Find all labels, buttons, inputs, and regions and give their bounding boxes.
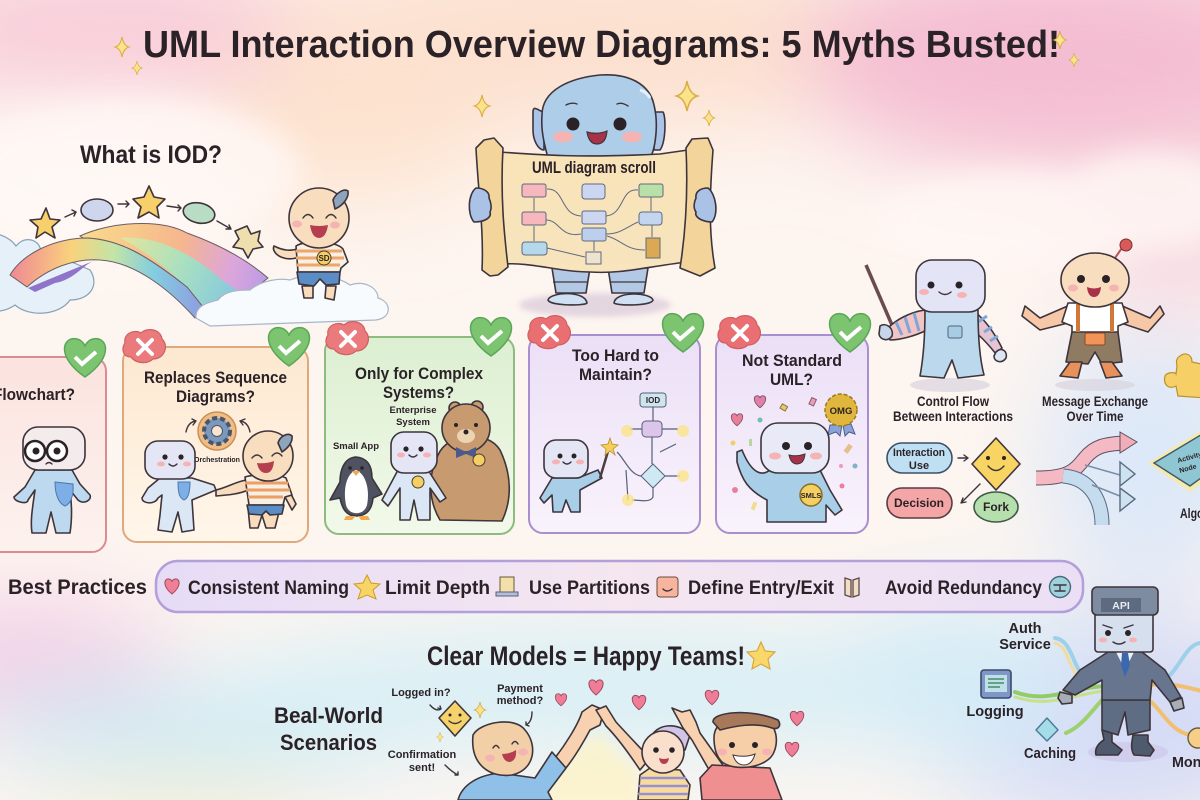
icon: orchestration gear bbox=[186, 412, 250, 464]
confetti bbox=[730, 396, 858, 510]
icon: smiling tile bbox=[657, 577, 678, 597]
heading: not standard UML: UML? bbox=[770, 370, 813, 389]
badge: OMG rosette: OMG bbox=[830, 406, 852, 417]
heading: only for complex systems bbox=[355, 364, 483, 402]
icon: logging panel bbox=[981, 670, 1011, 698]
badge: true heart bbox=[268, 328, 310, 366]
scene: team high five bbox=[388, 680, 804, 800]
character: celebrating robot bbox=[737, 423, 842, 522]
hearts bbox=[555, 680, 804, 757]
item: use partitions: Use Partitions bbox=[529, 577, 650, 599]
badge: OMG rosette bbox=[825, 394, 857, 436]
labels: scenario questions bbox=[388, 683, 543, 775]
title: UML Interaction Overview Diagrams: 5 Myths Busted! bbox=[143, 24, 1060, 66]
illustration: robot holding UML scroll bbox=[469, 75, 716, 317]
icon: robot face bbox=[1050, 576, 1070, 598]
label: logging: Logging bbox=[966, 704, 1024, 720]
panel: best practices pill bbox=[156, 561, 1083, 612]
icon: activity node tile: Node bbox=[1179, 463, 1197, 475]
character: teacher robot with pointer bbox=[866, 260, 1006, 392]
stars bbox=[30, 186, 263, 258]
item: define entry/exit: Define Entry/Exit bbox=[688, 577, 834, 599]
icon: open book bbox=[845, 578, 859, 597]
heading: only for complex systems: Systems? bbox=[383, 383, 454, 402]
character: robot shaking hands bbox=[142, 441, 216, 532]
scroll bbox=[476, 138, 715, 276]
label: enterprise system: System bbox=[396, 417, 430, 428]
label: small app: Small App bbox=[333, 441, 379, 452]
label: caching: Caching bbox=[1024, 746, 1076, 762]
heading: only for complex systems: Only for Complex bbox=[355, 364, 483, 383]
labels: scenario questions: Logged in? bbox=[391, 687, 451, 699]
section: message exchange over time bbox=[1022, 239, 1164, 525]
icon: puzzle piece bbox=[1165, 354, 1200, 398]
heading: replaces sequence diagrams bbox=[144, 368, 287, 406]
icon: monitoring dial bbox=[1188, 728, 1200, 748]
heading: best practices: Best Practices bbox=[8, 576, 147, 599]
character: robot with wand bbox=[540, 438, 618, 512]
flow diagram: IOD bbox=[617, 393, 689, 506]
label: auth service: Service bbox=[999, 637, 1051, 653]
label: enterprise system: Enterprise bbox=[390, 405, 436, 416]
badge: true heart bbox=[64, 339, 106, 377]
panel: myth 4 too hard to maintain bbox=[528, 314, 704, 533]
character: penguin bbox=[330, 457, 382, 520]
item: consistent naming: Consistent Naming bbox=[188, 577, 349, 599]
item: limit depth: Limit Depth bbox=[385, 577, 490, 599]
badge: true heart bbox=[470, 318, 512, 356]
character: man in blue shirt bbox=[458, 705, 604, 800]
badge: myth cross bbox=[718, 316, 760, 349]
boy with SD badge bbox=[273, 188, 349, 300]
panel: myth 3 only for complex systems bbox=[325, 318, 514, 534]
badge: myth cross bbox=[326, 322, 368, 355]
left cloud bbox=[0, 232, 94, 313]
icon: smiling decision diamond bbox=[436, 701, 486, 742]
item: avoid redundancy: Avoid Redundancy bbox=[885, 577, 1042, 599]
label: control flow bbox=[893, 394, 1013, 424]
character: celebrating robot: SMLS bbox=[801, 491, 821, 500]
node: decision: Decision bbox=[894, 496, 944, 510]
arrows: message flow bands bbox=[1036, 432, 1137, 525]
label: auth service: Auth bbox=[1008, 621, 1042, 637]
glow bbox=[546, 730, 642, 800]
icon: scroll note bbox=[496, 577, 518, 596]
robot head bbox=[533, 108, 665, 150]
node: interaction use: Use bbox=[909, 460, 929, 472]
section: algorithm partially cropped bbox=[1148, 354, 1200, 521]
heading: clear models equals happy teams: Clear Models = Happy Teams! bbox=[427, 641, 745, 671]
label: control flow: Control Flow bbox=[917, 394, 989, 409]
labels: scenario questions: Payment bbox=[497, 683, 543, 695]
node: fork: Fork bbox=[983, 500, 1009, 514]
heading: replaces sequence diagrams: Diagrams? bbox=[176, 387, 255, 406]
character: man in suit: API bbox=[1112, 600, 1130, 612]
node: decision bbox=[887, 488, 952, 518]
badge: myth cross bbox=[528, 316, 570, 349]
labels: scenario questions: Confirmation bbox=[388, 749, 456, 761]
character: robot enterprise bbox=[382, 432, 446, 520]
label: control flow: Between Interactions bbox=[893, 409, 1013, 424]
illustration: rainbow bridge with stars bbox=[0, 186, 388, 326]
flow diagram: IOD: IOD bbox=[646, 396, 660, 405]
rainbow bbox=[10, 223, 268, 318]
heading: real-world scenarios: Beal-World bbox=[274, 703, 383, 728]
robot hands bbox=[469, 188, 491, 222]
icon: heart bbox=[165, 579, 179, 594]
labels: scenario questions: method? bbox=[497, 695, 543, 707]
node: interaction use: Interaction bbox=[893, 447, 945, 459]
character: bear bbox=[431, 401, 509, 521]
character: boy shaking hands bbox=[216, 431, 296, 528]
heading: real-world scenarios: Scenarios bbox=[280, 730, 377, 755]
panel: myth 5 not standard UML bbox=[716, 314, 870, 533]
right cloud bbox=[196, 275, 388, 326]
badge: true heart bbox=[830, 314, 870, 352]
panel: myth 1 flowchart bbox=[0, 339, 106, 552]
node: fork bbox=[974, 492, 1018, 522]
heading: What is IOD?: What is IOD? bbox=[80, 141, 222, 169]
icon: caching gem bbox=[1036, 718, 1058, 741]
section: API gateway character bbox=[966, 587, 1200, 771]
badge: myth cross bbox=[123, 330, 165, 363]
heading: not standard UML: Not Standard bbox=[742, 351, 842, 370]
boy with SD badge: SD bbox=[318, 254, 330, 263]
heading: too hard to maintain: Too Hard to bbox=[572, 346, 659, 365]
scroll label: UML diagram scroll bbox=[532, 159, 656, 177]
badge: true heart bbox=[662, 314, 704, 352]
robot legs bbox=[552, 268, 648, 293]
node: interaction use bbox=[887, 443, 952, 473]
icon: star bbox=[354, 575, 380, 599]
labels: scenario questions: sent! bbox=[409, 762, 435, 774]
label: auth service bbox=[999, 621, 1051, 653]
character: man in pink shirt bbox=[672, 708, 782, 800]
label: message exchange: Over Time bbox=[1066, 409, 1124, 424]
character: cheering baby bbox=[1022, 239, 1164, 391]
heading: too hard to maintain: Maintain? bbox=[579, 365, 652, 384]
node: smiling diamond bbox=[958, 438, 1020, 503]
character: child in striped shirt bbox=[596, 706, 690, 800]
character: man in suit bbox=[1058, 587, 1184, 756]
icon: orchestration gear: Orchestration bbox=[194, 457, 240, 464]
label: enterprise system bbox=[390, 405, 436, 428]
heading: not standard UML bbox=[742, 351, 842, 389]
panel: myth 2 replaces sequence diagrams bbox=[123, 328, 310, 542]
label: message exchange: Message Exchange bbox=[1042, 394, 1148, 409]
heading: real-world scenarios bbox=[274, 703, 383, 755]
icon: activity node tile bbox=[1148, 428, 1200, 492]
connector wires bbox=[1015, 638, 1200, 735]
character: robot with glasses bbox=[14, 427, 90, 533]
heading: too hard to maintain bbox=[572, 346, 659, 384]
scroll flow diagram bbox=[522, 184, 663, 264]
label: message exchange bbox=[1042, 394, 1148, 424]
heading: replaces sequence diagrams: Replaces Sequence bbox=[144, 368, 287, 387]
section: control flow between interactions bbox=[866, 260, 1020, 522]
